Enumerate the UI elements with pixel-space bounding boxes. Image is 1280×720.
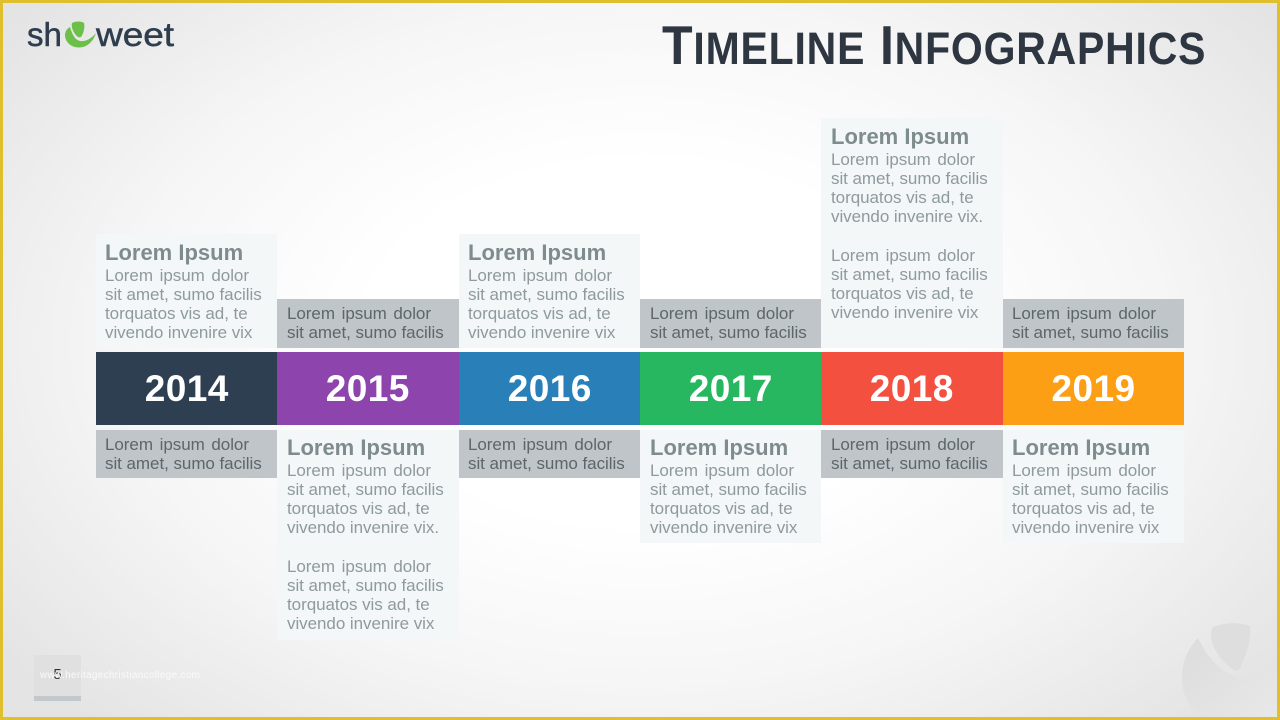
logo: showeet: sh <box>27 16 62 53</box>
year bar: 2015: 2015 <box>326 368 410 409</box>
panel: 2015 top <box>277 299 459 348</box>
panel: 2014 bottom <box>96 430 277 478</box>
panel: 2015 bottom <box>277 430 459 640</box>
year bar: 2015 <box>277 352 458 425</box>
panel: 2014 top: sit amet, sumo facilis <box>105 285 262 304</box>
panel: 2018 top: torquatos vis ad, te <box>831 188 974 207</box>
panel: 2019 top: sit amet, sumo facilis <box>1012 323 1169 342</box>
panel: 2018 bottom: sit amet, sumo facilis <box>831 454 988 473</box>
panel: 2018 top: sit amet, sumo facilis <box>831 265 988 284</box>
year bar: 2019: 2019 <box>1052 368 1135 409</box>
panel: 2018 top: torquatos vis ad, te <box>831 284 974 303</box>
page number box <box>34 655 81 701</box>
panel: 2014 top <box>96 234 277 348</box>
panel: 2015 top: sit amet, sumo facilis <box>287 323 444 342</box>
panel: 2017 top <box>640 299 821 348</box>
watermark logo <box>1182 624 1250 679</box>
watermark url: www.heritagechristiancollege.com <box>40 670 200 681</box>
panel: 2019 bottom: sit amet, sumo facilis <box>1012 480 1169 499</box>
year bar: 2014: 2014 <box>145 368 229 409</box>
panel: 2016 top: Lorem ipsum dolor <box>468 266 612 285</box>
panel: 2016 top <box>459 234 640 348</box>
panel: 2015 bottom: torquatos vis ad, te <box>287 595 430 614</box>
year bar: 2018 <box>821 352 1002 425</box>
panel: 2018 top: Lorem ipsum dolor <box>831 150 975 169</box>
page number box: 5 <box>53 666 62 683</box>
panel: 2016 top: sit amet, sumo facilis <box>468 285 625 304</box>
panel: 2019 top <box>1003 299 1184 348</box>
panel: 2016 top: torquatos vis ad, te <box>468 304 611 323</box>
panel: 2015 bottom: vivendo invenire vix <box>287 614 434 633</box>
panel: 2017 top: sit amet, sumo facilis <box>650 323 807 342</box>
year bar: 2017: 2017 <box>689 368 773 409</box>
panel: 2017 bottom: Lorem ipsum dolor <box>650 461 794 480</box>
panel: 2018 top: vivendo invenire vix. Lorem ipsum dolor <box>831 207 983 265</box>
panel: 2018 bottom <box>821 430 1003 478</box>
panel: 2014 top: torquatos vis ad, te <box>105 304 248 323</box>
panel: 2015 bottom: torquatos vis ad, te <box>287 499 430 518</box>
panel: 2017 bottom: torquatos vis ad, te <box>650 499 793 518</box>
year bar: 2017 <box>640 352 822 425</box>
panel: 2019 top: Lorem ipsum dolor <box>1012 304 1156 323</box>
panel: 2015 bottom: sit amet, sumo facilis <box>287 576 444 595</box>
panel: 2019 bottom: Lorem ipsum dolor <box>1012 461 1156 480</box>
panel: 2018 top: sit amet, sumo facilis <box>831 169 988 188</box>
panel: 2015 bottom: Lorem ipsum dolor <box>287 461 431 480</box>
panel: 2017 bottom: sit amet, sumo facilis <box>650 480 807 499</box>
panel: 2019 bottom: Lorem Ipsum <box>1012 435 1150 460</box>
panel: 2018 top: Lorem Ipsum <box>831 124 969 149</box>
panel: 2014 top: Lorem Ipsum <box>105 240 243 265</box>
panel: 2015 bottom: Lorem Ipsum <box>287 435 425 460</box>
panel: 2014 top: Lorem ipsum dolor <box>105 266 249 285</box>
panel: 2018 top: vivendo invenire vix <box>831 303 978 322</box>
panel: 2016 bottom: Lorem ipsum dolor <box>468 435 612 454</box>
panel: 2015 bottom: vivendo invenire vix. Lorem ipsum dolor <box>287 518 439 576</box>
panel: 2015 bottom: sit amet, sumo facilis <box>287 480 444 499</box>
panel: 2019 bottom <box>1003 430 1184 543</box>
logo: showeet: weet <box>96 16 174 53</box>
year bar: 2019 <box>1003 352 1184 425</box>
panel: 2017 bottom: Lorem Ipsum <box>650 435 788 460</box>
panel: 2017 bottom <box>640 430 821 543</box>
panel: 2014 bottom: sit amet, sumo facilis <box>105 454 262 473</box>
panel: 2018 top <box>821 118 1003 348</box>
panel: 2016 top: Lorem Ipsum <box>468 240 606 265</box>
year bar: 2016 <box>459 352 640 425</box>
year bar: 2018: 2018 <box>870 368 954 409</box>
panel: 2018 bottom: Lorem ipsum dolor <box>831 435 975 454</box>
panel: 2016 bottom <box>459 430 640 478</box>
panel: 2016 top: vivendo invenire vix <box>468 323 615 342</box>
logo: showeet <box>27 16 174 53</box>
year bar: 2014 <box>96 352 278 425</box>
panel: 2019 bottom: torquatos vis ad, te <box>1012 499 1155 518</box>
title: TIMELINE INFOGRAPHICS <box>662 14 1206 76</box>
panel: 2014 bottom: Lorem ipsum dolor <box>105 435 249 454</box>
panel: 2017 top: Lorem ipsum dolor <box>650 304 794 323</box>
panel: 2017 bottom: vivendo invenire vix <box>650 518 797 537</box>
year bar: 2016: 2016 <box>508 368 592 409</box>
panel: 2014 top: vivendo invenire vix <box>105 323 252 342</box>
panel: 2019 bottom: vivendo invenire vix <box>1012 518 1159 537</box>
panel: 2015 top: Lorem ipsum dolor <box>287 304 431 323</box>
panel: 2016 bottom: sit amet, sumo facilis <box>468 454 625 473</box>
